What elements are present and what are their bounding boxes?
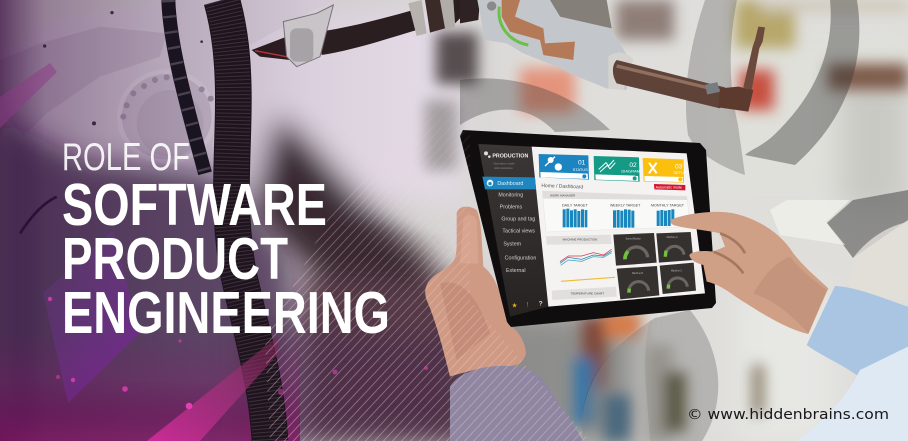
bar charts — [562, 204, 685, 228]
diagonal line pattern — [265, 119, 586, 441]
bar charts: DAILY TARGET — [562, 204, 589, 208]
title — [62, 136, 390, 346]
sidebar menu: Operation mode — [493, 161, 515, 165]
sidebar menu: Monitoring — [498, 193, 523, 199]
dashboard sidebar — [478, 144, 548, 317]
sidebar menu: Group and tag — [501, 216, 535, 222]
sidebar menu: System — [503, 241, 522, 247]
sidebar menu: Configuration — [505, 255, 536, 261]
breadcrumb: Home / Dashboard — [541, 183, 584, 190]
left sleeve — [450, 366, 583, 441]
title line: software: SOFTWARE — [62, 172, 327, 238]
automatic mode badge — [654, 184, 685, 190]
left purple shading — [0, 0, 560, 441]
card: setup — [643, 158, 687, 183]
corrugated hose — [222, 0, 270, 441]
card: diagram: 02 — [629, 162, 637, 169]
sidebar menu: External — [506, 268, 526, 274]
bar charts: WEEKLY TARGET — [610, 204, 641, 208]
right hand — [670, 212, 828, 334]
card: status: STATUS — [573, 167, 588, 172]
card: setup: 03 — [675, 164, 683, 171]
tablet — [460, 130, 716, 327]
line chart machine production — [546, 235, 617, 300]
right cuff — [807, 286, 908, 375]
dashboard white screen — [532, 147, 705, 307]
tablet body — [460, 130, 716, 327]
gauge panels: Machine A — [667, 236, 678, 239]
left hand — [425, 207, 526, 377]
right shirt — [797, 347, 908, 441]
card: diagram — [594, 156, 640, 182]
copyright website: © www.hiddenbrains.com — [687, 407, 889, 423]
robot arm hoses and clamps — [252, 0, 465, 67]
line chart machine production: MACHINE PRODUCTION — [563, 238, 597, 242]
robot welding tool — [460, 0, 765, 112]
gauge panels — [613, 232, 696, 299]
sidebar menu: ★ — [512, 302, 518, 310]
gauge panels: Machine C — [671, 270, 682, 272]
sidebar menu: ? — [539, 300, 543, 307]
sidebar menu: Dashboard — [497, 181, 523, 187]
line chart machine production: TEMPERATURE CHART — [571, 291, 604, 295]
glowing particles — [48, 297, 428, 409]
sidebar menu: PRODUCTION — [492, 154, 528, 160]
sidebar menu — [482, 151, 543, 310]
big translucent ribbon curves — [460, 0, 908, 441]
card: status: 01 — [578, 160, 586, 167]
twisted cable — [168, 0, 205, 173]
bar charts: MONTHLY TARGET — [651, 204, 685, 208]
pink diagonal bands — [0, 63, 277, 441]
sidebar menu: Administrative — [494, 166, 513, 170]
title line: engineering: ENGINEERING — [62, 280, 390, 346]
automatic mode badge: Automatic mode — [656, 186, 682, 190]
sidebar menu: ! — [527, 303, 529, 309]
translucent purple triangle — [43, 230, 140, 403]
gauge panels: Machine B — [632, 273, 643, 275]
work manager panel: WORK MANAGER — [550, 193, 576, 197]
work manager panel — [542, 191, 691, 232]
gauge panels: Speed Monitor — [626, 237, 641, 240]
card: setup: SETUP — [673, 170, 687, 175]
robot arm body — [0, 0, 333, 233]
title line: product: PRODUCT — [62, 226, 288, 292]
sidebar menu: Problems — [500, 204, 523, 210]
card: diagram: DIAGRAM — [621, 169, 640, 174]
shirt sleeves — [450, 286, 908, 441]
sidebar menu: Tactical views — [502, 228, 535, 234]
title line: role of: ROLE OF — [62, 136, 190, 179]
card: status — [539, 154, 589, 180]
